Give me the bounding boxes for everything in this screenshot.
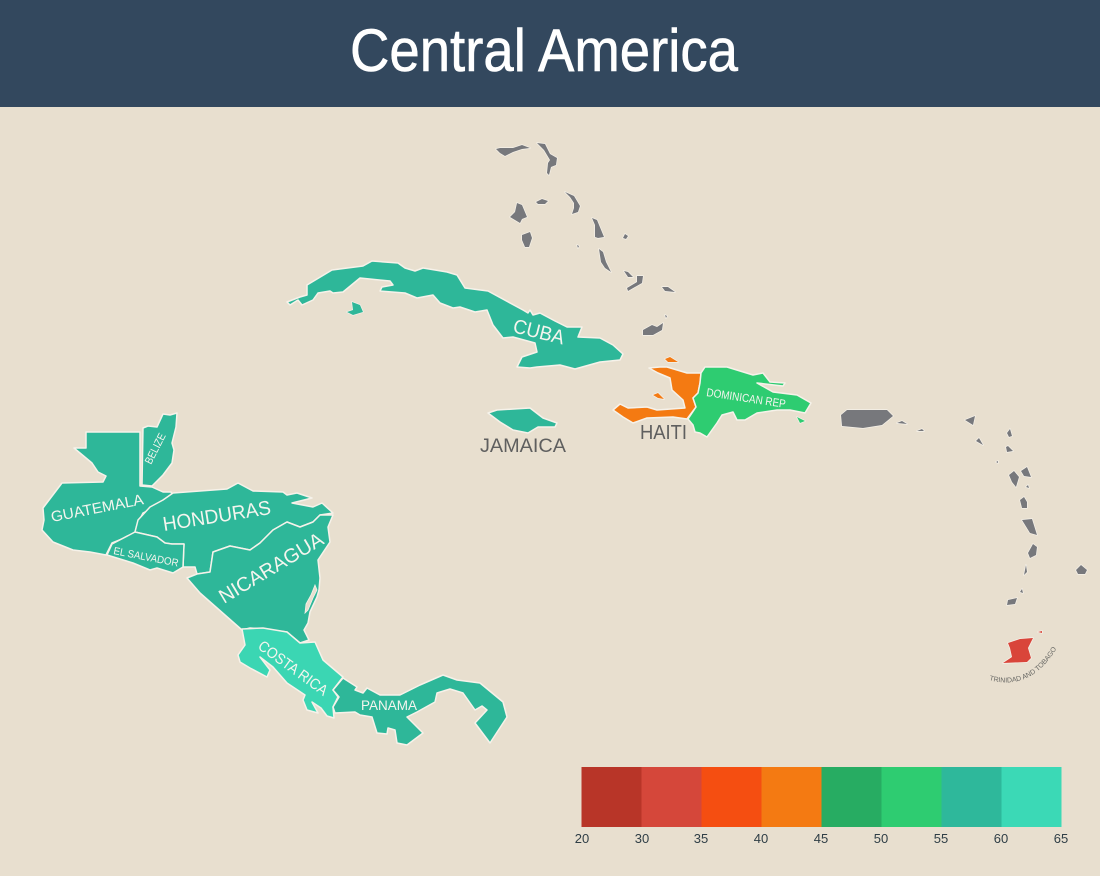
label: Dominican Rep: DOMINICAN REP bbox=[706, 387, 787, 411]
map: El Salvador bbox=[107, 532, 184, 573]
legend scale labels: 20 bbox=[575, 831, 589, 846]
header band bbox=[0, 0, 1100, 107]
label: Trinidad and Tobago: TRINIDAD AND TOBAGO bbox=[990, 647, 1056, 682]
legend scale labels: 40 bbox=[754, 831, 768, 846]
legend scale labels: 45 bbox=[814, 831, 828, 846]
map: Cuba bbox=[287, 261, 623, 369]
label: Haiti: HAITI bbox=[640, 422, 687, 444]
label: Panama: PANAMA bbox=[361, 697, 418, 713]
legend scale labels: 65 bbox=[1054, 831, 1068, 846]
map: Costa Rica bbox=[238, 628, 343, 718]
map: Nicaragua bbox=[187, 515, 333, 643]
legend scale labels: 55 bbox=[934, 831, 948, 846]
legend scale labels: 30 bbox=[635, 831, 649, 846]
label: Jamaica: JAMAICA bbox=[480, 436, 566, 457]
map: Puerto Rico and Virgin Islands bbox=[841, 410, 924, 431]
map: Bahamas islands bbox=[496, 143, 675, 335]
map: Lesser Antilles islands bbox=[965, 416, 1087, 605]
legend scale labels: 50 bbox=[874, 831, 888, 846]
label: Guatemala: GUATEMALA bbox=[50, 491, 145, 526]
map: Panama bbox=[333, 675, 507, 745]
map: Jamaica bbox=[480, 408, 566, 457]
legend scale labels: 35 bbox=[694, 831, 708, 846]
map: Dominican Republic bbox=[688, 367, 811, 437]
map: Guatemala bbox=[42, 432, 172, 555]
label: Cuba: CUBA bbox=[511, 316, 567, 350]
label: Costa Rica: COSTA RICA bbox=[255, 637, 331, 699]
label: El Salvador: EL SALVADOR bbox=[112, 545, 180, 570]
legend scale labels bbox=[575, 831, 1068, 846]
map: Belize bbox=[142, 413, 177, 486]
legend scale labels: 60 bbox=[994, 831, 1008, 846]
legend: colour scale bbox=[575, 767, 1068, 846]
title: Central America bbox=[350, 17, 739, 84]
label: Honduras: HONDURAS bbox=[161, 497, 272, 536]
label: Belize: BELIZE bbox=[143, 432, 169, 466]
label: Nicaragua: NICARAGUA bbox=[215, 528, 328, 608]
map: Honduras bbox=[135, 483, 333, 574]
map: Haiti bbox=[613, 357, 701, 444]
map: Trinidad and Tobago bbox=[990, 630, 1056, 682]
